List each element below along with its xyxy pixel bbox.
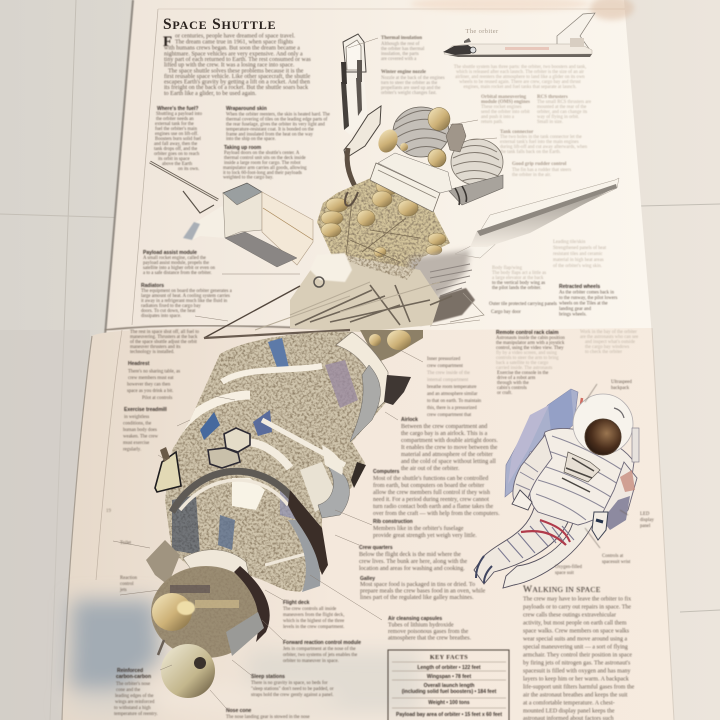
text block: remote control rack claim: Astronauts inside the cabin position [496,336,565,341]
text block: where's the fuel: Shuttling a payload into [156,112,203,117]
text block: orbiter caption: airliner, and reenters the atmosphere to land like a glider on its own [455,75,585,80]
text block: computers: Most of the shuttle's functions can be controlled [373,475,488,482]
text block: wing labels: Leading tile/skin [553,240,586,245]
text block: wing labels: a large elevator at the back [492,276,544,281]
text block: rib construction: provide great strength yet weigh very little. [373,533,477,539]
text block: payload assist module: payload assist module, propels the [143,261,209,266]
text block: where's the fuel: tank drops off, and the [154,147,197,152]
text block: payload assist module [143,250,216,276]
title: SPACE SHUTTLE [163,16,276,33]
text block: orbital maneuvering system: Small in size. [537,120,563,125]
text block: thermal insulation: Nozzle at the back of the engines [381,76,445,81]
text block: walking in space: spacesuit is filled with oxygen and has many [523,668,630,674]
text block: main labels below crew module [226,600,361,720]
text block: where's the fuel: engines use on lift-off. [155,132,198,137]
text block: wing labels: the pilot lands the orbiter. [492,286,541,291]
text block: where's the fuel [154,106,203,172]
text block: walking in space: payloads or to carry out repairs in space. The [523,604,631,610]
text block: galley: prepare meals the crew bases food in an oven, while [360,588,486,594]
text block: orbiter caption [454,65,586,90]
text block: remote control rack claim [496,330,638,396]
text block: walking in space: by firing jets of nitrogen gas. The astronaut's [523,660,631,666]
text block: wing labels: material in high heat areas [553,258,604,263]
text block: wing labels: to the vertical body wing as [492,281,545,286]
text block: radiators: large amount of heat. A cooling system carries [141,294,230,299]
text block: payload assist module: satellite into a higher orbit or even on [143,266,216,271]
text block: main labels below crew module: orbiter, two systems of jets enables the [283,653,357,658]
text block: air cleansing capsules [388,616,472,642]
text block: wing labels: landing gear and [559,307,592,312]
text block: taking up room: Payload doors on the shuttle's center. A [224,151,300,156]
small labels: toilet and reaction control jets: 19 [106,509,112,514]
text block: reinforced carbon-carbon [114,668,158,717]
text block: remote control rack claim: to check the orbiter [585,350,623,355]
text block: wing labels: Body flap/wing [492,266,523,271]
text block: page-edge caption: of the space shuttle adjust the orbit [130,340,198,345]
text block: where's the fuel: external tank for the [155,122,194,127]
text block: walking in space: mounted LED display panel keeps the [523,708,615,714]
text block: orbiter caption: The shuttle system has three parts: the orbiter, two boosters and tank, [454,65,586,70]
text block: remote control rack claim: are the astronauts who can see [580,335,638,340]
text block: orbital maneuvering system [481,95,591,178]
text block: headline labels on lower page left [127,361,180,401]
table: key facts: Payload bay area of orbiter • 15 feet x 60 feet [396,712,502,718]
text block: remote control rack claim: or craft. [497,391,512,396]
text block: galley [360,576,486,601]
text block: radiators [141,283,233,319]
sub-element: backpack [505,389,582,497]
text block: page-edge caption: The rest in space shut off, all fuel to [130,330,200,335]
sub-element: hull ribs [288,332,411,592]
astronaut labels: Controls at [602,554,624,559]
text block: walking in space: activity, but most people on earth call them [523,620,627,626]
text block: exercise treadmill: must exercise [123,441,149,446]
text block: inner pressurized crew compartment: The crew inside of the [427,371,470,376]
text block: headline labels on lower page left: Headrest [128,361,150,367]
small labels: toilet and reaction control jets: Toilet [120,541,132,546]
table: key facts: Weight • 100 tons [428,700,470,706]
text block: introduction: escapes Earth's gravity by getting a lift on a rocket. And then [164,78,310,86]
text block: orbital maneuvering system: and push it into a [481,115,515,120]
text block: wraparound skin: frame and insulated from the heat on the way [226,132,313,138]
text block: orbital maneuvering system: orbiter, and can change its [537,110,587,115]
leader lines [113,38,497,708]
text block: introduction: F [163,34,172,50]
text block: reinforced carbon-carbon: carbon-carbon [116,674,151,680]
text block: remote control rack claim: controls to steer the arm to bring [496,356,559,361]
text block: computers: allow the crew members full control if they wish [373,489,490,496]
astronaut labels: backpack [611,386,630,391]
text block: headline labels on lower page left: crew members must eat [128,376,174,381]
text block: computers [373,469,500,517]
table: key facts: (including solid fuel boosters) • 184 feet [402,689,497,695]
text block: airlock: material and atmosphere of the orbiter [401,451,493,458]
text block: radiators: doors. To cut down, the heat [141,309,196,314]
text block: air cleansing capsules: Tubes of lithium hydroxide [388,622,454,628]
text block: reinforced carbon-carbon: Reinforced [117,668,143,674]
text block: airlock: compartment with double airtight doors. [401,438,498,444]
text block: where's the fuel: its orbit in space [158,157,190,162]
text block: main labels below crew module: "sleep stations" don't need to be padded, or [251,687,334,692]
text block: exercise treadmill: human body does [123,428,157,433]
text block: wraparound skin: temperature-resistant coat. It is bonded on the [226,128,314,132]
text block: walking in space: crew calls these outings extravehicular [523,612,616,618]
text block: inner pressurized crew compartment: internal compartment [427,378,469,383]
text block: crew quarters: location and areas for washing and cooking. [359,565,465,572]
text block: introduction: with humans crews began. But soon the dream became a [164,46,300,52]
text block: page-edge caption: technology is installed. [130,350,174,355]
text block: headline labels on lower page left: however they can then [127,382,171,388]
text block: taking up room: manipulator arm carries all goods, allowing [223,166,307,171]
sub-element: helmet [573,394,639,462]
text block: introduction: or centuries, people have dreamed of space travel. [175,32,296,40]
text block: wraparound skin: thermal covering of tiles on the leading edge parts of [226,118,328,122]
text block: where's the fuel: orbiter goes on to reach [154,152,200,157]
text block: where's the fuel: above the Earth [162,162,193,167]
table: key facts: Length of orbiter • 122 feet [417,665,481,671]
text block: where's the fuel: Where's the fuel? [157,106,198,112]
text block: walking in space: at a comfortable temperature. A chest- [523,700,615,706]
text block: rib construction: Rib construction [373,519,413,525]
text block: exercise treadmill: in weightless [124,415,149,420]
text block: payload assist module: Payload assist module [143,250,197,256]
text block: thermal insulation: Thermal insulation [381,36,422,41]
illustration: nose section [146,540,270,698]
illustration: robot arm and payload module [150,162,313,267]
text block: page-edge caption [130,330,200,355]
panel: lower curled book page [62,326,674,720]
text block: remote control rack claim: carried inside. The astronauts [496,366,553,371]
text block: main labels below crew module: straps hold the crew gently against a panel. [251,693,334,698]
text block: where's the fuel: fuel the orbiter's main [155,127,198,132]
text block: reinforced carbon-carbon: to withstand a high [114,706,151,711]
astronaut labels: panel [640,524,651,529]
text block: thermal insulation [381,36,445,96]
text block: reinforced carbon-carbon: The orbiter's nose [116,682,150,687]
text block: remote control rack claim: back a satellite to the cargo [496,361,549,366]
sky illustration behind nose [65,600,420,719]
text block: thermal insulation: are covered with a [381,57,417,62]
text block: main labels below crew module: Sleep stations [251,674,285,680]
astronaut labels: Oxygen-filled [555,565,583,570]
text block: computers: Computers [373,469,400,475]
text block: wing labels: Retracted wheels [559,284,600,290]
text block: introduction: lifted up with the crew. It was a losing race into space. [164,62,295,68]
text block: reinforced carbon-carbon: temperature of reentry. [114,712,158,717]
text block: where's the fuel: on its own. [178,167,199,172]
text block: introduction: nightmare. Space vehicles are very expensive. And only a [164,52,303,58]
illustration: main engines and thrusters [375,107,503,205]
astronaut labels: Ultraspeed [611,380,632,385]
text block: exercise treadmill: weaken. The crew [123,434,158,440]
text block: taking up room: it to lock 60-foot-long and their payloads [223,171,302,176]
text block: crew quarters: Below the flight deck is the mid where the [359,551,461,558]
text block: walking in space: wear special suits and move around using a [523,636,627,642]
text block: remote control rack claim: Remote control rack claim [496,330,559,336]
text block: orbiter caption: which is released after each launch. The orbiter is the size of an air [456,70,584,75]
text block: orbital maneuvering system: during lift-off and cut away afterwards, when [500,145,588,150]
text block: remote control rack claim: the cargo bay windows [585,345,629,350]
text block: orbital maneuvering system: way of flying in orbit. [537,115,579,120]
text block: exercise treadmill: Exercise treadmill [124,407,167,413]
text block: remote control rack claim: control, using the video view. They [496,346,564,351]
text block: introduction [163,32,312,97]
text block: air cleansing capsules: Air cleansing capsules [388,616,442,622]
text block: inner pressurized crew compartment [427,357,482,418]
astronaut labels: display [640,518,654,523]
text block: walking in space: armchair. They control their position in space [523,652,632,658]
table: key facts: Wingspan • 78 feet [427,674,471,680]
text block: orbital maneuvering system: These rocket engines [481,105,522,110]
text block: crew quarters: Crew quarters [359,545,393,551]
text block: inner pressurized crew compartment: and an atmosphere similar [427,392,478,397]
text block: introduction: The dream came true in 1961, when space flights [175,38,294,46]
text block: remote control rack claim: through with the [497,381,529,386]
text block: computers: over from the craft — with help from the computers. [373,510,500,517]
text block: remote control rack claim: cabin's controls [497,386,527,391]
panel: top book page [105,0,652,336]
text block: main labels below crew module: maneuvers from the flight deck, [283,613,344,618]
text block: inner pressurized crew compartment: this, there is a pressurized [427,406,477,411]
text block: airlock: It enables the crew to move between the [401,445,498,451]
text block: orbital maneuvering system: The small RCS thrusters are [537,100,591,105]
text block: crew quarters [359,545,468,572]
text block: orbital maneuvering system: Good grip rudder control [512,162,567,167]
small labels: toilet and reaction control jets: Reaction [120,576,138,581]
text block: orbital maneuvering system: return path. [481,120,503,125]
text block: walking in space: life-support unit filters harmful gases from the [523,684,635,690]
text block: wraparound skin [226,106,330,142]
text block: walking in space: WALKING IN SPACE [523,584,601,595]
illustration: orbiter side view with heading [443,13,595,57]
text block: galley: lines part of the regulated like galley machines. [360,594,474,601]
text block: taking up room: weighted to the cargo bay. [223,176,273,180]
text block: orbital maneuvering system: The fin has a rudder that steers [512,168,571,173]
sub-element: legs [474,500,596,588]
text block: radiators: dissipates into space. [141,314,181,319]
text block: thermal insulation: turn to steer the orbiter as the [381,81,437,86]
text block: remote control rack claim: and inspect what's outside [585,340,635,345]
astronaut labels [555,380,654,576]
text block: thermal insulation: insulation, the parts [381,52,419,57]
illustration: astronaut [474,389,639,588]
text block: main labels below crew module: Nose cone [226,708,252,714]
text block: remote control rack claim: fly by a video screen, and using [496,351,557,356]
text block: main labels below crew module: Forward reaction control module [283,640,361,646]
text block: walking in space: layers to keep him or her warm. A backpack [523,676,629,682]
text block: computers: need it. For a period during reentry, crew cannot [373,497,489,503]
text block: main labels below crew module: which is the highest of the three [283,619,344,624]
text block: orbital maneuvering system: external tank's fuel into the main engines [500,140,579,145]
text block: wing labels: Strengthened panels of heat [553,246,607,251]
text block: wing labels: to the runway, the pilot lowers [559,296,617,301]
text block: orbital maneuvering system: The two holes in the tank connector let the [500,135,582,140]
text block: main labels below crew module: The nose landing gear is stowed in the nose [226,715,310,720]
text block: wing labels: resistant tiles and ceramic [553,252,603,257]
text block: airlock: the air out of the orbiter. [401,465,460,472]
text block: walking in space: space walks. Crew members on space walks [523,628,630,634]
text block: inner pressurized crew compartment: crew compartment that [427,413,472,418]
text block: introduction: The space shuttle solves these problems because it is the [168,68,304,74]
text block: exercise treadmill: regularly. [123,448,141,452]
text block: radiators: Radiators [141,283,164,289]
text block: where's the fuel: and fall away, then the [154,142,197,147]
text block: remote control rack claim: the manipulator arm with a joystick [496,341,565,346]
small labels: toilet and reaction control jets: jets [119,588,127,593]
text block: galley: Galley [360,576,375,582]
text block: radiators: it away in a refrigerant much like the fluid in [141,299,228,304]
sub-element: glove [592,512,608,540]
table: key facts: KEY FACTS [430,654,468,661]
text block: inner pressurized crew compartment: breathe room temperature [427,385,477,390]
text block: walking in space: The crew may have to leave the orbiter to fix [523,596,631,602]
text block: wing labels: brings wheels. [559,312,587,318]
text block: thermal insulation: the orbiter has thermal [381,47,425,52]
illustration: crew module cutaway [150,325,411,600]
text block: orbital maneuvering system: send the orbiter into orbit [481,110,530,115]
text block: airlock: the cargo bay is an airlock. This is a [401,431,488,437]
text block: walking in space: air the astronaut breathes and keeps the suit [523,692,628,698]
text block: air cleansing capsules: remove poisonous gases from the [388,628,469,635]
text block: airlock: Between the crew compartment and [401,424,487,430]
text block: radiators: The equipment on board the orbiter generates a [141,289,233,294]
text block: headline labels on lower page left: Pilot at controls [142,396,173,401]
text block: where's the fuel: Boosters burn solid fuel [155,137,202,142]
text block: remote control rack claim: Exercise the console in the [497,371,548,376]
text block: reinforced carbon-carbon: cone and the [116,688,140,693]
text block: reinforced carbon-carbon: leading edges of the [115,694,154,699]
text block: taking up room: thermal control unit sits on the deck inside [224,156,306,161]
text block: inner pressurized crew compartment: crew compartment [427,364,463,369]
text block: page-edge caption: maneuver thrusters and its [130,345,181,350]
text block: headline labels on lower page left: There's no sharing table, as [128,370,180,374]
small labels: toilet and reaction control jets: control [120,582,134,587]
astronaut labels: LED [640,512,650,517]
text block: wraparound skin: When the orbiter reenters, the skin is heated hard. The [226,112,330,118]
text block: introduction: first reusable space vehicle. Like other spacecraft, the shuttle [164,73,311,80]
text block: airlock [401,417,498,472]
text block: wing labels: Outer tile protected carrying panels [489,302,557,307]
text block: where's the fuel: the orbiter needs an [156,117,194,122]
text block: orbital maneuvering system: the tank falls back on the Earth. [500,150,561,155]
text block: wing labels: wheels on the Tiles at the [559,302,608,306]
text block: orbiter caption: wheels to be reused again. There are crew, cargo bay and thrust [459,80,581,85]
small labels: toilet and reaction control jets [106,509,138,593]
text block: payload assist module: a to a safe distance from the orbiter. [143,271,212,276]
text block: orbital maneuvering system: the orbiter in the air. [512,173,551,178]
text block: taking up room: Taking up room [224,145,262,151]
text block: orbital maneuvering system: module (OMS) engines [481,100,530,105]
text block: exercise treadmill: conditions, the [123,422,151,426]
text block: orbital maneuvering system: RCS thrusters [537,95,568,100]
illustration: wing [405,178,619,326]
text block: main labels below crew module: There is no gravity in space, so beds for [251,681,328,686]
text block: walking in space [523,584,635,720]
sub-element: torso and arms [512,428,637,530]
text block: page-edge caption: maneuvering. Thrusters at the back [130,335,198,340]
illustration: tail fin [341,34,381,192]
text block: walking in space: special maneuvering unit — a sort of flying [523,644,628,650]
text block: airlock: and the cold of space without letting all [401,458,496,465]
text block: reinforced carbon-carbon: wings are reinforced [115,700,155,705]
text block: wing labels: As the orbiter comes back in [559,290,615,296]
text block: computers: from earth, but computers on board the orbiter [373,482,484,489]
table: key facts [388,650,509,720]
text block: main labels below crew module: The crew controls all inside [283,607,336,612]
text block: main labels below crew module: levels in the crew compartment. [283,625,344,630]
text block: galley: Most space food is packaged in tins or dried. To [360,581,475,588]
text block: payload assist module: A small rocket engine, called the [143,256,206,261]
text block: main labels below crew module: orbiter to maneuver in space. [283,659,339,664]
text block: orbital maneuvering system: mounted at the rear of the [537,105,586,110]
text block: orbiter caption: engines, main rocket and fuel tanks that separate at launch. [463,85,577,90]
text block: main labels below crew module: Jets in compartment at the nose of the [283,647,356,652]
text block: air cleansing capsules: atmosphere that the crew breathes. [388,636,472,642]
text block: main labels below crew module: Flight deck [283,600,310,606]
text block: wing labels: The body flaps act a little as [492,271,546,276]
text block: thermal insulation: Although the rest of [381,42,420,47]
text block: orbital maneuvering system: Orbital maneuvering [481,95,527,100]
text block: thermal insulation: Winter engine nozzle [381,70,427,75]
text block: wing labels: Cargo bay door [491,310,521,315]
illustration: fuselage trusses and forward structure [204,253,452,362]
text block: introduction: its freight on the back of a rocket. But the shuttle soars back [164,84,308,91]
sub-element: airlock hatches [155,428,250,492]
text block: taking up room [223,145,307,180]
text block: introduction: tiny part of each returned to Earth. The rest consumed or was [164,56,312,63]
text block: airlock: Airlock [401,417,418,423]
text block: thermal insulation: propellants are used up and the [381,86,441,91]
illustration: orbiter side view with heading: The orbiter [466,28,499,35]
astronaut labels: space suit [555,571,574,576]
text block: exercise treadmill [123,407,167,452]
text block: wraparound skin: Wraparound skin [226,106,267,112]
text block: rib construction [373,519,477,539]
text block: thermal insulation: orbiter's weight changes fast. [381,91,437,96]
text block: wraparound skin: into the ship on the space. [226,137,276,142]
text block: rib construction: Members like in the orbiter's fuselage [373,525,464,532]
text block: radiators: radiators fixed to the cargo bay [141,304,201,309]
text block: computers: turn radio contact both earth and a flame takes the [373,503,493,510]
text block: headline labels on lower page left: space as you drink a bit. [127,389,173,394]
text block: taking up room: inside a large room for cargo. The robot [224,161,301,166]
text block: wing labels [489,240,617,318]
illustration: aft fuselage engine bay [317,152,452,268]
text block: remote control rack claim: Work in the bay of the orbiter [580,330,637,335]
table: key facts: Overall launch length [424,683,474,689]
astronaut labels: spacesuit wrist [602,560,631,565]
text block: orbital maneuvering system: Tank connector [500,130,534,135]
text block: wing labels: of the orbiter's wing skin. [553,264,602,269]
text block: introduction: to Earth like a glider, to be used again. [164,91,257,97]
text block: inner pressurized crew compartment: to that on earth. To maintain [427,399,482,404]
text block: remote control rack claim: drive of a robot arm [497,376,536,381]
text block: inner pressurized crew compartment: Inner pressurized [427,357,461,362]
text block: wraparound skin: the rear fuselage, gives the orbiter its very light and [226,122,325,128]
text block: crew quarters: crew lives. The bunk are here, along with the [359,559,468,565]
